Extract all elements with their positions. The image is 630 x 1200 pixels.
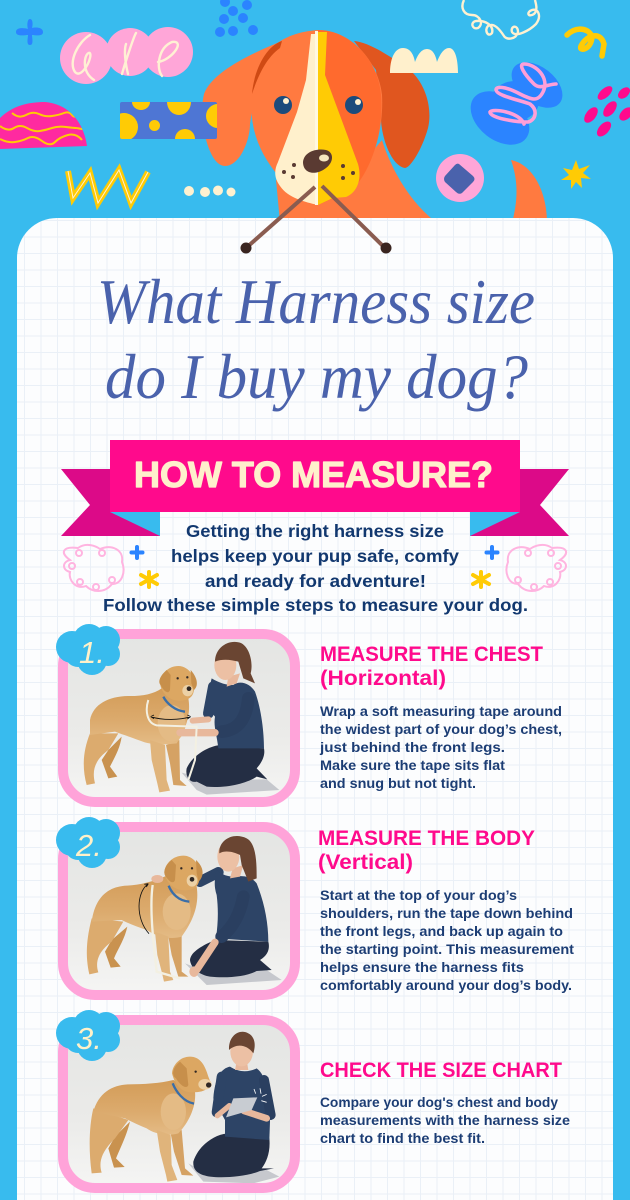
intro text: helps keep your pup safe, comfy bbox=[171, 546, 459, 566]
step 2 text: MEASURE THE BODY bbox=[318, 827, 535, 850]
step 1 photo panel bbox=[56, 624, 295, 802]
intro text: Getting the right harness size bbox=[186, 521, 444, 541]
icon: right yellow star bbox=[473, 572, 489, 587]
intro text bbox=[103, 521, 528, 615]
measuring tape and arrow bbox=[139, 884, 180, 978]
icon: left yellow star bbox=[141, 572, 157, 587]
icon: yellow squiggle bbox=[567, 29, 604, 56]
woman bbox=[180, 642, 267, 787]
measuring tape and arrow bbox=[147, 700, 197, 780]
mat bbox=[185, 963, 282, 985]
step 3 photo panel bbox=[56, 1010, 295, 1188]
icon: pink circle with blue diamond bbox=[436, 154, 484, 202]
mat bbox=[188, 1163, 279, 1183]
step 2 text: helps ensure the harness fits bbox=[320, 959, 524, 975]
dog face yellow blaze bbox=[318, 32, 360, 205]
icon: blue blobs with pink spiral bbox=[460, 53, 571, 156]
step 1 text: and snug but not tight. bbox=[320, 775, 476, 791]
intro text: and ready for adventure! bbox=[205, 571, 426, 591]
step 1 text: Make sure the tape sits flat bbox=[320, 757, 505, 773]
dog head bbox=[251, 30, 382, 205]
woman's hands bbox=[151, 875, 199, 977]
step 3 text: chart to find the best fit. bbox=[320, 1130, 485, 1146]
icon: yellow zigzag bbox=[68, 170, 148, 203]
title bbox=[97, 266, 535, 412]
ribbon banner bbox=[61, 440, 569, 536]
golden retriever bbox=[84, 666, 197, 792]
step 1 text: the widest part of your dog’s chest, bbox=[320, 721, 562, 737]
banner heading: HOW TO MEASURE? bbox=[134, 454, 493, 495]
step 2 photo panel bbox=[56, 817, 295, 995]
main card bbox=[17, 218, 613, 1200]
title: What Harness size bbox=[97, 266, 535, 337]
step 1 text: Wrap a soft measuring tape around bbox=[320, 703, 562, 719]
woman bbox=[190, 836, 272, 977]
step 3 number badge: 3. bbox=[76, 1021, 102, 1056]
step 1 text: (Horizontal) bbox=[320, 667, 446, 690]
icon: right pink cloud bbox=[506, 545, 566, 591]
step 2 text: Start at the top of your dog’s bbox=[320, 887, 517, 903]
step 1 text: just behind the front legs. bbox=[319, 739, 505, 755]
dog right ear bbox=[354, 41, 429, 168]
icon: pink dashes bbox=[582, 84, 630, 139]
step 2 text: comfortably around your dog’s body. bbox=[320, 977, 572, 993]
icon: left pink cloud bbox=[64, 545, 124, 591]
step 2 text: the front legs, and back up again to bbox=[320, 923, 563, 939]
icon: pink half circle with wavy lines bbox=[0, 102, 90, 149]
mat bbox=[182, 773, 279, 795]
step 3 text: CHECK THE SIZE CHART bbox=[320, 1059, 562, 1082]
icon: cream crown shape bbox=[390, 48, 458, 73]
icon: left blue plus bbox=[132, 547, 142, 558]
dog left ear bbox=[202, 41, 282, 166]
step 3 number badge bbox=[56, 1010, 120, 1061]
step 3 text: measurements with the harness size bbox=[320, 1112, 570, 1128]
golden retriever bbox=[90, 1057, 212, 1182]
intro text: Follow these simple steps to measure your dog. bbox=[103, 595, 528, 615]
dog illustration bbox=[202, 30, 436, 222]
icon: four cream dots bbox=[184, 186, 236, 197]
icon: yellow star bbox=[561, 160, 591, 189]
dog right eye bbox=[345, 96, 363, 114]
step 3 text: Compare your dog's chest and body bbox=[320, 1094, 558, 1110]
icon: blue dots bbox=[215, 0, 258, 37]
woman bbox=[193, 1032, 274, 1177]
icon: pink circles with cream script bbox=[60, 27, 193, 84]
step 2 text: shoulders, run the tape down behind bbox=[320, 905, 573, 921]
icon: blue patterned rectangle bbox=[120, 102, 217, 139]
dog body bbox=[276, 140, 436, 222]
step 1 number badge bbox=[56, 624, 120, 675]
harness straps bbox=[240, 186, 392, 254]
step 2 text bbox=[318, 827, 574, 993]
step 2 text: the starting point. This measurement bbox=[320, 941, 574, 957]
title: do I buy my dog? bbox=[105, 341, 528, 412]
step 2 number badge bbox=[56, 817, 120, 868]
dog left eye bbox=[274, 96, 292, 114]
dog ear fold bbox=[252, 41, 282, 94]
step 2 text: (Vertical) bbox=[318, 851, 413, 874]
icon: cream loops bbox=[462, 0, 539, 39]
golden retriever bbox=[87, 856, 203, 982]
dog centre stripe bbox=[315, 31, 318, 205]
icon: dog tail bbox=[511, 160, 547, 219]
step 2 number badge: 2. bbox=[75, 828, 102, 863]
step 1 text: MEASURE THE CHEST bbox=[320, 643, 543, 666]
step 1 text bbox=[319, 643, 562, 791]
dog face cream blaze bbox=[275, 34, 318, 205]
dog nose bbox=[303, 150, 332, 173]
step 3 text bbox=[320, 1059, 570, 1146]
icon: right blue plus bbox=[486, 547, 498, 558]
icon: blue plus bbox=[16, 19, 43, 45]
dog whisker dots bbox=[282, 163, 355, 180]
step 1 number badge: 1. bbox=[79, 635, 105, 670]
